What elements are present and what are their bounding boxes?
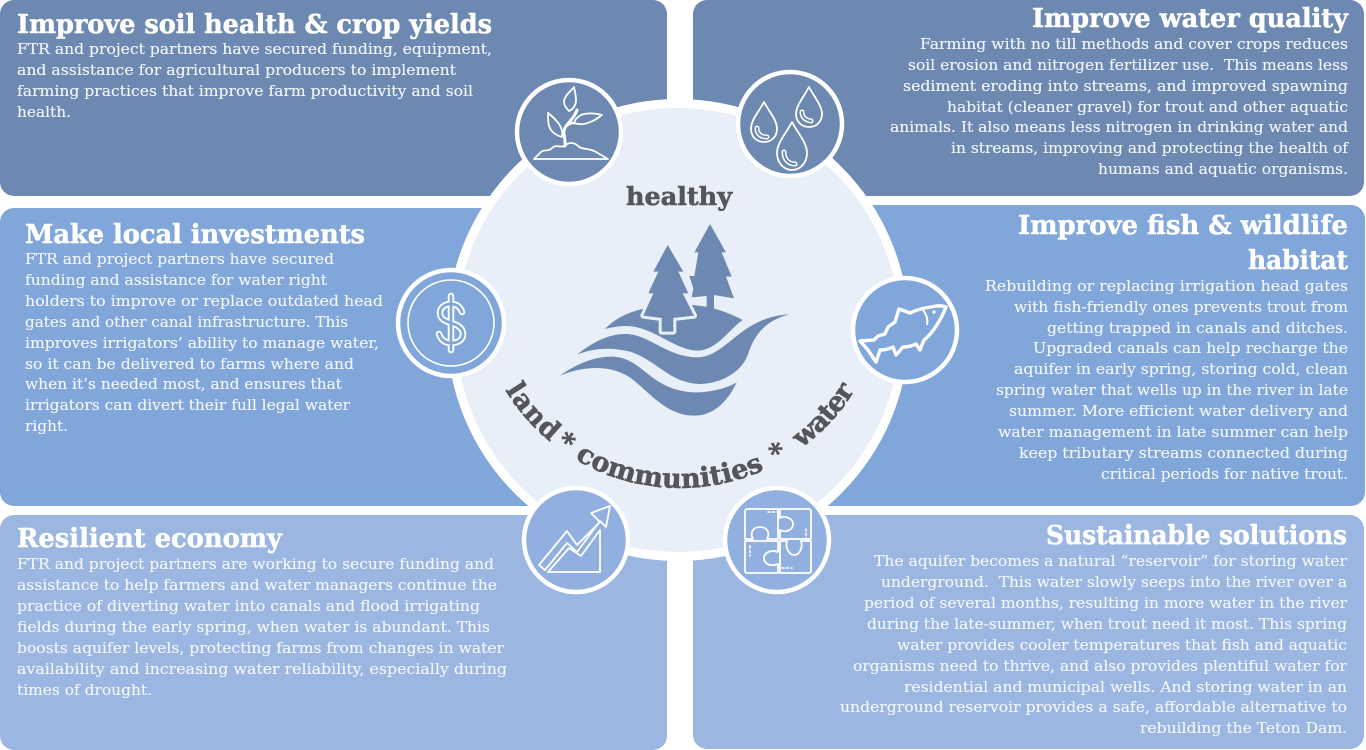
text: fish habitat body: [985, 277, 1348, 483]
text: local investments body: improves irrigators’ ability to manage water,: [25, 334, 379, 352]
icon: trout: [853, 278, 957, 382]
icon: seedling: [517, 80, 621, 184]
text: water quality body: in streams, improving and protecting the health of: [951, 139, 1349, 157]
text: local investments body: so it can be delivered to farms where and: [25, 355, 354, 373]
text: soil health body: health.: [17, 103, 71, 121]
text: sustainable solutions body: [840, 552, 1348, 737]
front tree: [643, 245, 694, 332]
text: resilient economy body: [17, 555, 507, 699]
curved text: land communities water: *: [562, 432, 576, 446]
text: local investments body: holders to improve or replace outdated head: [25, 292, 383, 310]
text: soil health body: farming practices that improve farm productivity and soil: [17, 82, 473, 100]
text: water quality body: sediment eroding into streams, and improved spawning: [903, 77, 1348, 95]
center circle: [447, 99, 909, 561]
text: sustainable solutions body: underground. This water slowly seeps into the river over a: [881, 573, 1347, 591]
text: sustainable solutions body: water provides cooler temperatures that fish and aquatic: [897, 636, 1347, 654]
curved text: land communities water: *: [768, 442, 782, 456]
text: resilient economy body: practice of diverting water into canals and flood irrigating: [17, 597, 480, 615]
curved text: land communities water: [505, 379, 853, 488]
text: sustainable solutions body: residential and municipal wells. And storing water in an: [904, 678, 1347, 696]
heading: improve fish and wildlife habitat: Improve fish & wildlife: [1018, 211, 1348, 241]
curved text: land communities water: communities: [578, 449, 762, 488]
panel: make local investments: [0, 208, 680, 506]
heading: resilient economy: Resilient economy: [17, 524, 283, 554]
text: fish habitat body: with fish-friendly ones prevents trout from: [1014, 298, 1348, 316]
text: resilient economy body: boosts aquifer levels, protecting farms from changes in water: [17, 639, 505, 657]
text: local investments body: when it’s needed most, and ensures that: [25, 375, 342, 393]
text: water quality body: habitat (cleaner gravel) for trout and other aquatic: [947, 98, 1348, 116]
back tree: [689, 224, 734, 309]
text: sustainable solutions body: during the late-summer, when trout need it most. This spring: [867, 615, 1347, 633]
upper wave: [577, 314, 789, 384]
text: sustainable solutions body: underground reservoir provides a safe, affordable alternative to: [840, 698, 1347, 716]
panel: sustainable solutions: [693, 515, 1364, 749]
heading: improve fish and wildlife habitat: habitat: [1248, 246, 1348, 276]
text: fish habitat body: getting trapped in canals and ditches.: [1047, 319, 1348, 337]
text: soil health body: FTR and project partners have secured funding, equipment,: [17, 40, 492, 58]
heading: make local investments: Make local investments: [25, 220, 365, 250]
text: local investments body: funding and assistance for water right: [25, 271, 327, 289]
text: fish habitat body: water management in late summer can help: [998, 423, 1348, 441]
heading: healthy: healthy: [626, 182, 733, 211]
heading: improve water quality: Improve water quality: [1032, 4, 1349, 34]
hill: [605, 304, 743, 351]
curved text: land communities water: land: [505, 379, 562, 442]
logo: trees, hill and waves: [560, 224, 789, 416]
icon: puzzle: [725, 488, 829, 592]
icon: dollar coin: [398, 270, 504, 376]
text: local investments body: irrigators can divert their full legal water: [25, 396, 351, 414]
text: sustainable solutions body: organisms need to thrive, and also provides plentiful water for: [853, 657, 1348, 675]
panel: improve water quality: [693, 0, 1364, 196]
text: local investments body: [25, 250, 383, 435]
text: fish habitat body: critical periods for native trout.: [1101, 465, 1348, 483]
lower wave: [560, 357, 737, 416]
text: fish habitat body: spring water that wells up in the river in late: [996, 381, 1348, 399]
text: water quality body: animals. It also means less nitrogen in drinking water and: [890, 118, 1348, 136]
text: fish habitat body: Rebuilding or replacing irrigation head gates: [985, 277, 1348, 295]
text: resilient economy body: times of drought.: [17, 681, 152, 699]
panel: improve fish and wildlife habitat: [680, 205, 1365, 506]
text: local investments body: right.: [25, 417, 68, 435]
text: local investments body: FTR and project partners have secured: [25, 250, 334, 268]
text: fish habitat body: summer. More efficient water delivery and: [1009, 402, 1348, 420]
panel: improve soil health: [0, 0, 667, 196]
heading: sustainable solutions: Sustainable solutions: [1046, 521, 1347, 551]
text: water quality body: [890, 35, 1349, 178]
text: fish habitat body: Upgraded canals can help recharge the: [1033, 339, 1348, 357]
text: soil health body: [17, 40, 492, 121]
text: soil health body: and assistance for agricultural producers to implement: [17, 61, 456, 79]
text: resilient economy body: availability and increasing water reliability, especially during: [17, 660, 507, 678]
icon: rising chart: [524, 488, 628, 592]
text: resilient economy body: assistance to help farmers and water managers continue the: [17, 576, 497, 594]
text: water quality body: humans and aquatic organisms.: [1098, 160, 1348, 178]
text: sustainable solutions body: period of several months, resulting in more water in the river: [864, 594, 1348, 612]
panel: resilient economy: [0, 515, 667, 750]
text: local investments body: gates and other canal infrastructure. This: [25, 313, 348, 331]
text: water quality body: Farming with no till methods and cover crops reduces: [920, 35, 1348, 53]
heading: improve fish and wildlife habitat: [1018, 211, 1348, 276]
text: resilient economy body: fields during the early spring, when water is abundant. This: [17, 618, 490, 636]
text: fish habitat body: aquifer in early spring, storing cold, clean: [1014, 360, 1348, 378]
text: water quality body: soil erosion and nitrogen fertilizer use. This means less: [908, 56, 1348, 74]
text: sustainable solutions body: The aquifer becomes a natural “reservoir” for storing water: [874, 552, 1348, 570]
text: fish habitat body: keep tributary streams connected during: [1019, 444, 1348, 462]
heading: improve soil health: Improve soil health & crop yields: [17, 10, 492, 40]
text: resilient economy body: FTR and project partners are working to secure funding and: [17, 555, 494, 573]
curved text: land communities water: water: [792, 382, 853, 446]
text: sustainable solutions body: rebuilding the Teton Dam.: [1140, 719, 1347, 737]
icon: water drops: [738, 72, 842, 176]
